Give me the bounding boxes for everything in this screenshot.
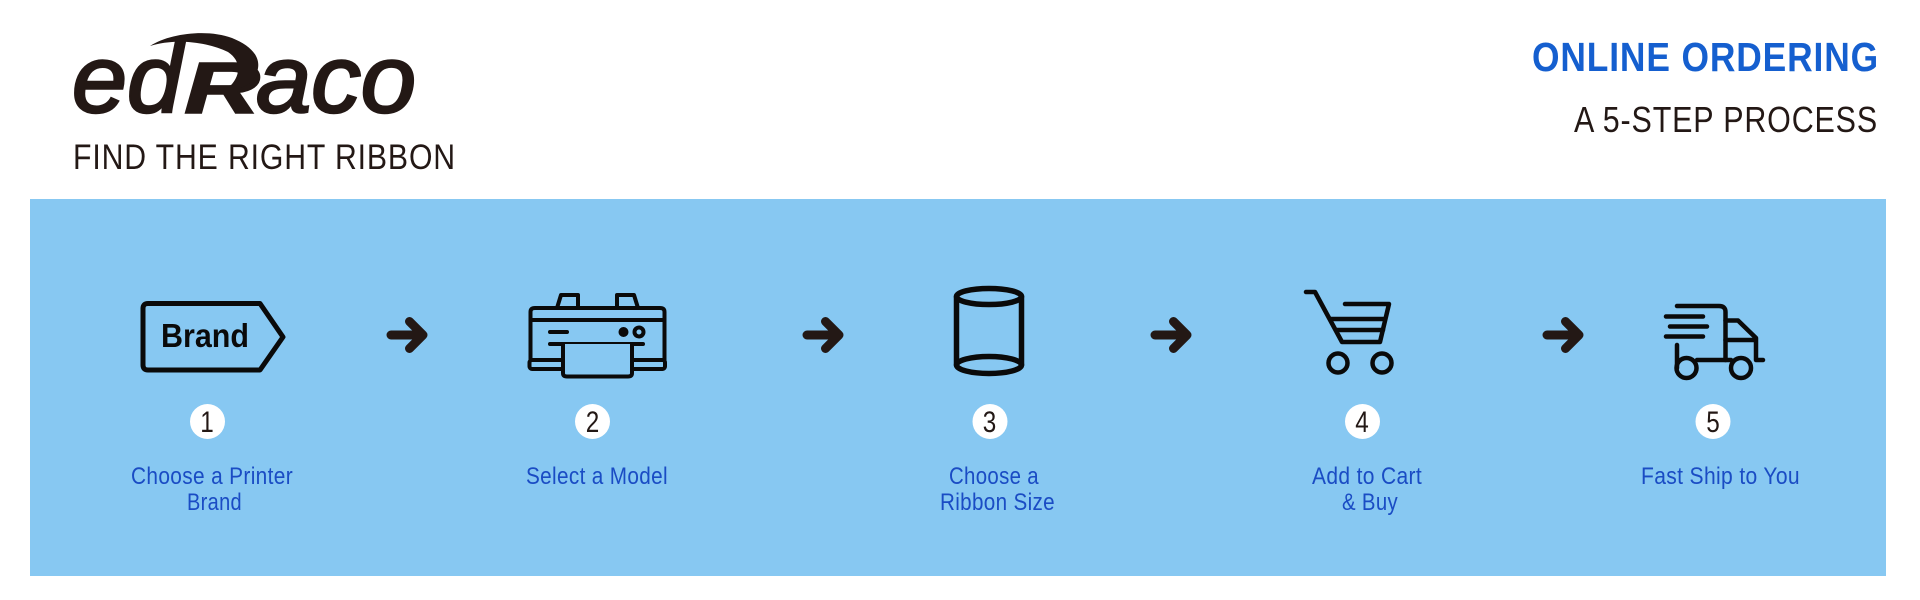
number badge 5 xyxy=(1696,404,1730,439)
label: choose a ribbon size: Ribbon Size xyxy=(940,489,1055,516)
number badge 2 xyxy=(575,404,610,439)
label: choose a ribbon size: Choose a xyxy=(949,463,1039,490)
step 4: add to cart and buy xyxy=(1306,292,1422,516)
number badge 3: 3 xyxy=(983,406,996,439)
icon: brand tag: Brand xyxy=(161,317,249,354)
icon: delivery truck xyxy=(1666,306,1763,378)
label: choose a printer brand: Choose a Printer xyxy=(131,463,293,490)
icon: ribbon cylinder xyxy=(956,288,1022,374)
logo: edRaco: R xyxy=(184,49,260,129)
label: select a model: Select a Model xyxy=(526,463,668,490)
arrow 4 xyxy=(1547,322,1579,348)
logo: edRaco xyxy=(72,26,416,133)
arrow 1 xyxy=(391,322,423,348)
label: choose a printer brand: Brand xyxy=(187,489,242,516)
tagline: FIND THE RIGHT RIBBON xyxy=(73,138,456,177)
label: choose a printer brand xyxy=(131,463,293,516)
number badge 2: 2 xyxy=(586,406,599,439)
icon: brand tag xyxy=(143,304,283,370)
number badge 1 xyxy=(190,404,225,439)
number badge 4: 4 xyxy=(1355,406,1369,439)
arrow 2 xyxy=(807,322,839,348)
number badge 4 xyxy=(1345,404,1380,439)
icon: shopping cart xyxy=(1306,292,1392,372)
number badge 3 xyxy=(972,404,1008,439)
step 3: choose a ribbon size xyxy=(940,288,1055,516)
step 2: select a model xyxy=(526,295,668,490)
label: add to cart and buy xyxy=(1312,463,1422,516)
number badge 5: 5 xyxy=(1706,406,1720,439)
step 5: fast ship to you xyxy=(1641,306,1800,490)
label: choose a ribbon size xyxy=(940,463,1055,516)
panel: process steps background xyxy=(30,199,1886,576)
icon: printer xyxy=(530,295,665,376)
label: add to cart and buy: & Buy xyxy=(1342,489,1398,516)
label: fast ship to you: Fast Ship to You xyxy=(1641,463,1800,490)
logo: edRaco: aco xyxy=(256,26,416,133)
logo: edRaco: ed xyxy=(72,26,185,133)
number badge 1: 1 xyxy=(200,406,214,439)
step 1: choose a printer brand xyxy=(131,304,293,516)
arrow 3 xyxy=(1155,322,1187,348)
label: add to cart and buy: Add to Cart xyxy=(1312,463,1422,490)
